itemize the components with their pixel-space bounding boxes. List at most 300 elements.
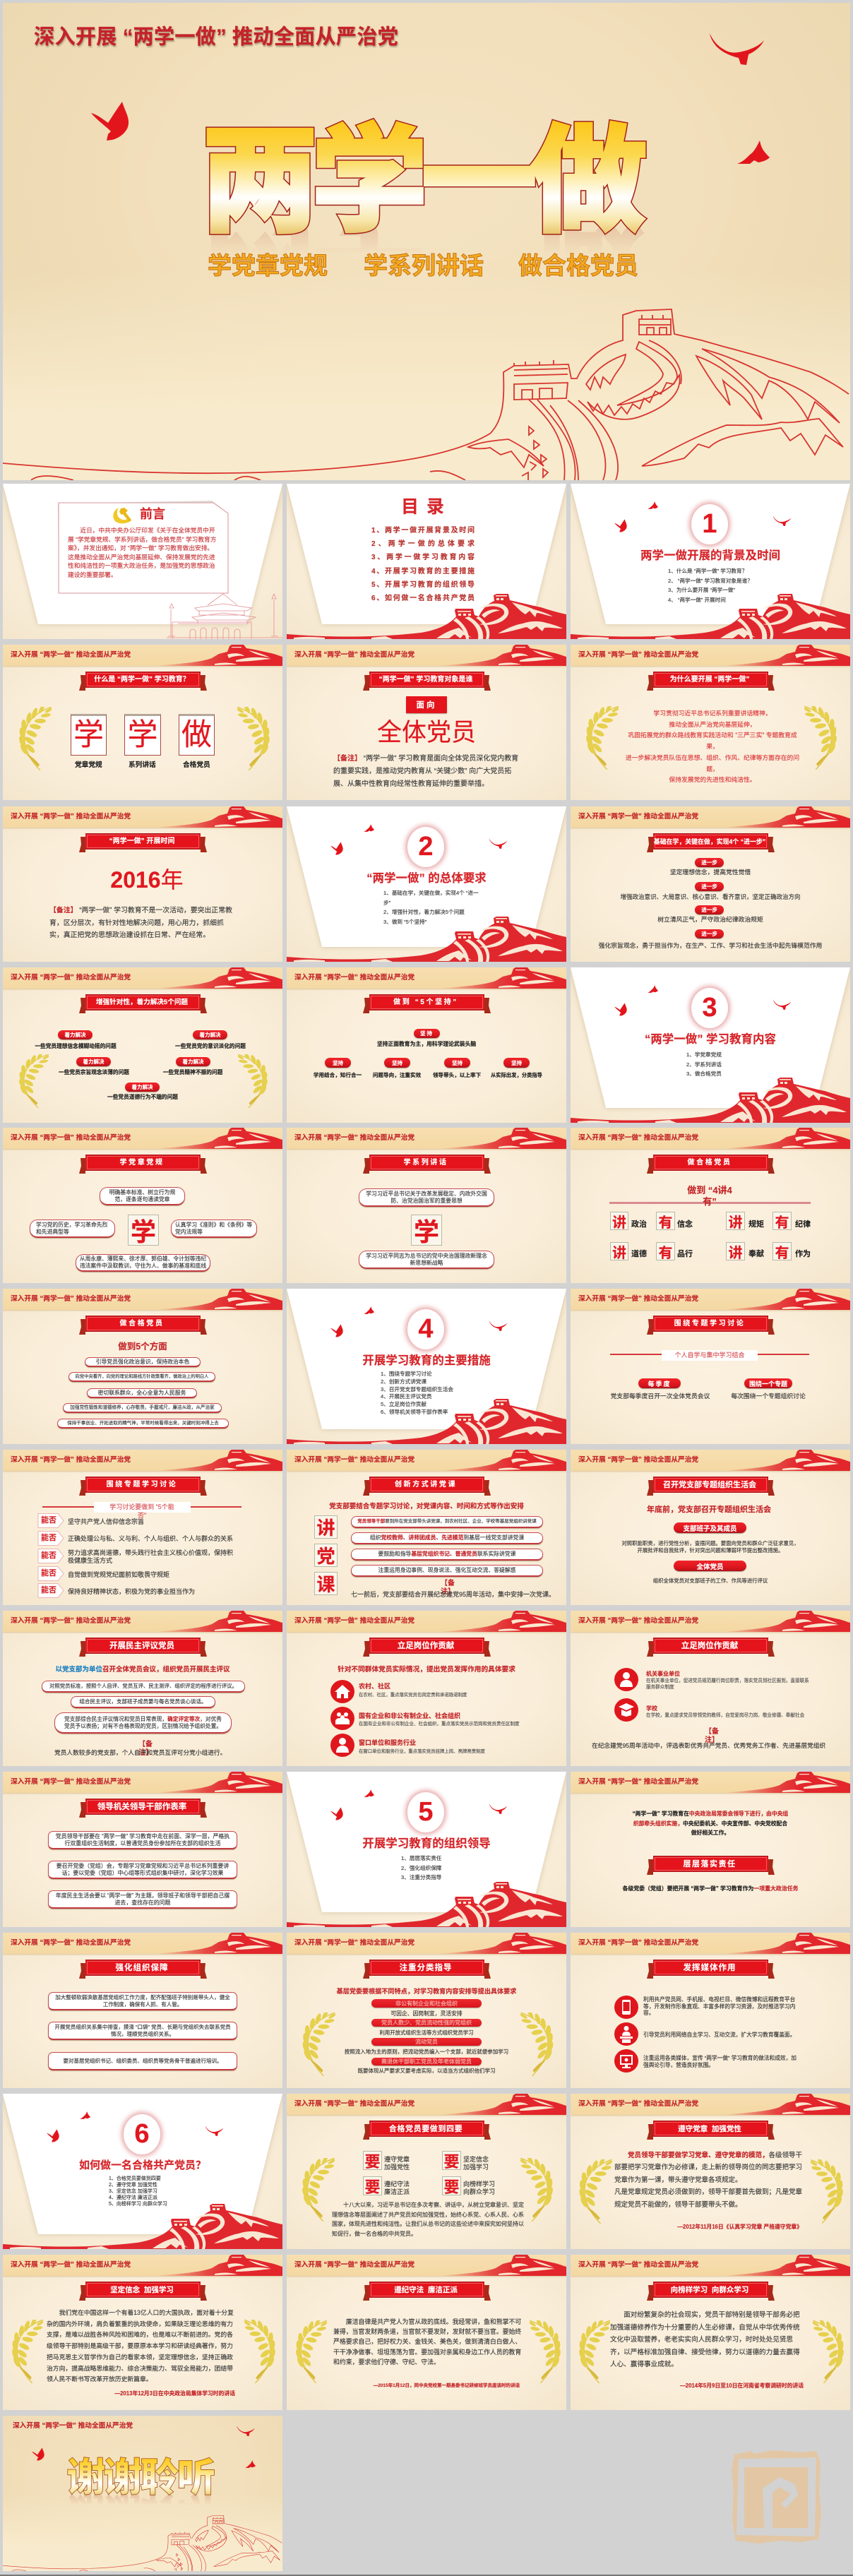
label text: 学习讨论要做到 “5个能否” <box>109 1503 174 1519</box>
pill 3: 密切联系群众，全心全意为人民服务 <box>98 1390 186 1395</box>
problem 1: 一些党员理想信念模糊动摇的问题 <box>35 1043 117 1049</box>
paragraph <box>614 2149 803 2211</box>
header band: 深入开展 “两学一做” 推动全面从严治党 <box>294 651 414 659</box>
bird left <box>91 102 129 141</box>
slide: 发挥媒体作用 <box>571 1933 850 2088</box>
group title: 农村、社区 <box>359 1683 390 1690</box>
pill right: 围绕一个专题 <box>749 1380 787 1387</box>
media text 2: 引导党员利用网络自主学习、互动交流，扩大学习教育覆盖面。 <box>643 2032 795 2038</box>
pill 2 <box>351 1532 543 1544</box>
bar 4 <box>371 2058 482 2065</box>
text 1: 坚定理想信念，提高党性觉悟 <box>670 869 751 876</box>
wheat right <box>520 2157 553 2222</box>
reasons text <box>626 710 799 783</box>
icon: school <box>614 1698 638 1722</box>
pill 4 <box>63 1403 222 1413</box>
great wall silhouette <box>571 594 850 639</box>
header band: 深入开展 “两学一做” 推动全面从严治党 <box>294 2261 414 2269</box>
section list: 1、层层落实责任 <box>401 1855 441 1861</box>
slide: 目录 <box>287 484 566 639</box>
面向 box: 面向 <box>417 701 436 710</box>
slide: 遵守党章 <box>571 2094 850 2249</box>
card captions: 系列讲话 <box>129 761 156 769</box>
note label: 【备注】 <box>441 1580 455 1596</box>
slide: section 3 <box>571 967 850 1123</box>
ribbon title <box>647 1854 775 1875</box>
box 要: 要 <box>364 2178 380 2196</box>
section list <box>109 2176 167 2207</box>
white label: 个人自学与集中学习结合 <box>674 1352 744 1359</box>
card 学: 学 <box>73 718 104 752</box>
wheat right <box>804 706 837 770</box>
header band: 深入开展 “两学一做” 推动全面从严治党 <box>11 1134 131 1142</box>
text top: 坚持正面教育为主，用科学理论武装头脑 <box>377 1041 476 1047</box>
pill right <box>744 1378 792 1388</box>
ribbon title <box>79 672 207 691</box>
slide: 立足岗位作贡献 2 <box>571 1611 850 1766</box>
bar 3: 流动党员 <box>415 2039 438 2045</box>
section list: 1、学党章党规 <box>686 1051 722 1058</box>
number circle <box>407 1792 444 1832</box>
panel 2: 要召开党委（党组）会，专题学习党章党规和习近平总书记系列重要讲话；要以党委（党组）中心组等形式组织集中研讨，深化学习效果 <box>56 1863 229 1876</box>
ribbon title <box>79 1474 207 1496</box>
pill 4: 着力解决 <box>182 1059 203 1065</box>
header band <box>287 1450 566 1471</box>
paragraph: 党员领导干部要做学习党章、遵守党章的模范，各级领导干部要把学习党章作为必修课，走上新的领导岗位的同志要把学习党章作为第一课，带头遵守党章各项规定。 <box>614 2152 802 2184</box>
box <box>726 1242 745 1260</box>
slide: 层层落实责任 <box>571 1772 850 1927</box>
pill 1: 引导党员强化政治意识，保持政治本色 <box>96 1359 189 1364</box>
header band: 深入开展 “两学一做” 推动全面从严治党 <box>578 1617 698 1625</box>
responsibility text: 各级党委（党组）要把开展 “两学一做” 学习教育作为一项重大政治任务 <box>622 1885 798 1892</box>
subheading: 针对不同群体党员实际情况，提出党员发挥作用的具体要求 <box>338 1666 515 1674</box>
reasons text: 学习贯彻习近平总书记系列重要讲话精神， <box>653 710 772 717</box>
header band: 深入开展 “两学一做” 推动全面从严治党 <box>11 974 131 982</box>
media text 1: 利用共产党员网、手机报、电视栏目、微信微博和远程教育平台等，开发制作形象直观、丰富多样的学习资源，及时推送学习内容。 <box>643 1996 795 2016</box>
header band <box>571 1933 850 1954</box>
label: 遵纪守法 <box>384 2181 410 2188</box>
number circle <box>407 1309 444 1349</box>
section list: 2、遵守党章 加强党性 <box>109 2183 157 2188</box>
contents list: 3、两学一做学习教育内容 <box>371 554 475 561</box>
contents list: 5、开展学习教育的组织领导 <box>371 581 475 589</box>
icon: computer <box>614 2049 638 2073</box>
slide: 坚定信念 <box>3 2255 282 2410</box>
ribbon title: 领导机关领导干部作表率 <box>97 1803 186 1811</box>
pill 4: 加强党性锻炼和道德修养，心存敬畏，手握戒尺，廉洁从政，从严治家 <box>70 1405 215 1409</box>
pill 2: 结合民主评议，支部班子成员要与每名党员谈心谈话。 <box>79 1698 206 1705</box>
header band <box>287 2255 566 2276</box>
white trapezoid <box>287 806 566 949</box>
box <box>726 1212 745 1230</box>
group title: 学校 <box>646 1705 657 1712</box>
header band <box>3 645 282 666</box>
header band: 深入开展 “两学一做” 推动全面从严治党 <box>294 1617 414 1625</box>
reasons text: 巩固拓展党的群众路线教育实践活动和 “三严三实” 专题教育成果， <box>628 732 797 750</box>
wheat left <box>19 1054 49 1108</box>
subheading: 以党支部为单位召开全体党员会议，组织党员开展民主评议 <box>55 1666 230 1674</box>
icon: person <box>614 1668 638 1691</box>
source: —2014年5月9日至10日在河南省考察调研时的讲话 <box>680 2383 804 2389</box>
ribbon title: 召开党支部专题组织生活会 <box>663 1481 756 1489</box>
box 讲: 讲 <box>316 1517 335 1539</box>
thanks title with reflection <box>3 2416 282 2571</box>
pill 5: 保持干事创业、开拓进取的精气神，平常时候看得出来，关键时刻冲得上去 <box>67 1421 219 1425</box>
text 3: 树立清风正气，严守政治纪律政治规矩 <box>657 916 763 923</box>
pill 1 <box>58 1030 93 1039</box>
pill 2: 向党中央看齐，向党的理论和路线方针政策看齐，做政治上的明白人 <box>76 1374 208 1378</box>
note label: 【备注】 <box>705 1728 719 1744</box>
label: 加强党性 <box>384 2164 410 2171</box>
pill top: 坚持 <box>420 1030 434 1037</box>
slide: 为什么要开展 <box>571 645 850 800</box>
slide: 创新方式讲党课 <box>287 1450 566 1605</box>
pill 2 <box>68 1372 215 1382</box>
striped band <box>609 1202 811 1204</box>
text 4: 领导带头，以上率下 <box>433 1072 481 1078</box>
ribbon title: 做合格党员 <box>120 1320 164 1328</box>
contents heading: 目录 <box>401 497 452 517</box>
cover lower light area <box>3 271 850 480</box>
ribbon title <box>363 2118 491 2140</box>
ribbon title: 围绕专题学习讨论 <box>674 1320 745 1328</box>
wheat left <box>302 2012 335 2076</box>
tag 3: 能否 <box>41 1551 56 1560</box>
header band: 深入开展 “两学一做” 推动全面从严治党 <box>294 1456 414 1464</box>
tag 1: 能否 <box>41 1516 56 1525</box>
slide: 5个能否 <box>3 1450 282 1605</box>
paragraph: 我们党在中国这样一个有着13亿人口的大国执政，面对着十分复杂的国内外环境，肩负着繁重的执政使命，如果缺乏理论思维的有力支撑，是难以战胜各种风险和困难的，也是难以不断前进的。党的各级领导干部特别是高级干部，要原原本本学习和研读经典著作，努力把马克思主义哲学作为自己的看家本领，坚定理想信念，坚持正确政治方向，提高战略思维能力、综合决策能力、驾驭全局能力，团结带领人民不断书写改革开放历史新篇章。 <box>47 2309 234 2383</box>
label: 信念 <box>677 1220 693 1229</box>
slide: 遵纪守法 <box>287 2255 566 2410</box>
pill 4 <box>444 1058 470 1068</box>
source: —2013年12月3日在中央政治局集体学习时的讲话 <box>114 2390 235 2397</box>
slide: 领导干部作表率 <box>3 1772 282 1927</box>
great wall silhouette <box>287 1772 566 1927</box>
birds <box>287 1289 566 1444</box>
panel 1: 党员领导干部要在 “两学一做” 学习教育中走在前面、深学一层，严格执行双重组织生活制度，以普通党员身份参加所在支部的组织生活 <box>56 1833 229 1846</box>
section list: 4、遵纪守法 廉洁正派 <box>109 2195 157 2200</box>
subtitle: 做合格党员 <box>518 253 638 280</box>
slide: 什么是两学一做 <box>3 645 282 800</box>
wheat right <box>813 2320 844 2383</box>
wheat left <box>296 2320 327 2383</box>
card 做 <box>179 714 215 756</box>
slide: section 5 <box>287 1772 566 1927</box>
ribbon title: 开展民主评议党员 <box>109 1642 174 1650</box>
white trapezoid <box>571 967 850 1123</box>
ribbon title: “两学一做” 学习教育对象是谁 <box>379 676 472 684</box>
great wall outline <box>3 309 849 480</box>
section list: 5、立足岗位作贡献 <box>381 1401 426 1407</box>
section list: 1、什么是 “两学一做” 学习教育？ <box>668 568 747 574</box>
panel 1 <box>48 1992 237 2010</box>
pill 5 <box>503 1058 530 1068</box>
bubble left: 学习党的历史，学习革命先烈和先进典型等 <box>36 1222 107 1234</box>
header band: 深入开展 “两学一做” 推动全面从严治党 <box>578 1295 698 1303</box>
slide: 民主评议 <box>3 1611 282 1766</box>
ribbon title <box>363 1635 491 1657</box>
problem 2: 一些党员党的意识淡化的问题 <box>175 1043 246 1049</box>
box: 有 <box>775 1215 789 1230</box>
label: 品行 <box>677 1250 693 1258</box>
bubble bottom: 学习习近平同志为总书记的党中央治国理政新理念新思想新战略 <box>366 1253 487 1265</box>
reasons text: 推动全面从严治党向基层延伸， <box>669 721 756 728</box>
paragraph: 十八大以来，习近平总书记在多次考察、讲话中，从树立党章意识、坚定理想信念等层面阐述了共产党员如何加强党性，始终心系党、心系人民、心系国家，体现先进性和纯洁性。让我们从总书记的这些论述中来探究如何坚持以知促行，做一名合格的中共党员。 <box>332 2202 524 2237</box>
面向 box <box>406 696 447 713</box>
bubble right: 认真学习《准则》和《条例》等党内法规等 <box>175 1222 252 1234</box>
white label <box>94 1502 191 1513</box>
label: 遵守党章 <box>384 2156 410 2163</box>
ribbon title <box>647 1313 775 1335</box>
pill 5: 着力解决 <box>131 1084 153 1090</box>
box: 讲 <box>729 1215 743 1230</box>
section list: 2、强化组织保障 <box>401 1865 441 1871</box>
ribbon title: 立足岗位作贡献 <box>398 1642 454 1650</box>
card 学 <box>124 714 161 756</box>
section heading: “两学一做” 学习教育内容 <box>645 1033 776 1046</box>
white trapezoid <box>287 484 566 627</box>
text 1: 可因企、因岗制宜，灵活安排 <box>390 2010 463 2017</box>
section list <box>668 568 753 603</box>
media text 3: 注重运用各类媒体，宣传 “两学一做” 学习教育的做法和成效，加强舆论引导，营造良好氛围。 <box>643 2055 797 2068</box>
group text: 在学校，重点提求党员带领党的教师，自觉爱岗尽力岗、敬业修德、奉献社会 <box>646 1713 804 1718</box>
number circle: 4 <box>418 1314 434 1344</box>
header band <box>571 1128 850 1149</box>
group text: 在窗口单位和服务行业，重点落实党员挂牌上岗、亮牌亮责制度 <box>359 1749 485 1754</box>
box 要: 要 <box>443 2178 459 2196</box>
section list: 4、开展民主评议党员 <box>381 1393 432 1400</box>
pill 2: 全体党员 <box>696 1563 723 1570</box>
header band: 深入开展 “两学一做” 推动全面从严治党 <box>11 1778 131 1786</box>
slide: 四要 <box>287 2094 566 2249</box>
header band: 深入开展 “两学一做” 推动全面从严治党 <box>294 1134 414 1142</box>
header band <box>3 1772 282 1793</box>
icon: service person <box>330 1734 354 1757</box>
number circle: 2 <box>418 832 434 861</box>
icon: hammer and sickle <box>113 508 131 524</box>
pill 1: 着力解决 <box>65 1032 86 1038</box>
bar 2 <box>371 2019 482 2027</box>
subheading: 党支部要结合专题学习讨论，对党课内容、时间和方式等作出安排 <box>329 1503 524 1510</box>
label: 向群众学习 <box>463 2188 495 2195</box>
header band: 深入开展 “两学一做” 推动全面从严治党 <box>294 974 414 982</box>
header band <box>571 2094 850 2115</box>
pill 3 <box>384 1058 410 1068</box>
panel 1 <box>48 1831 237 1849</box>
character box 学: 学 <box>414 1217 439 1246</box>
pill 3 <box>695 905 724 914</box>
big words: 全体党员 <box>377 719 476 746</box>
great wall silhouette <box>571 967 850 1123</box>
box: 有 <box>658 1215 672 1230</box>
pill 3 <box>54 1712 232 1734</box>
ribbon title <box>647 2118 775 2140</box>
pill 2 <box>71 1696 215 1708</box>
section list: 3、做合格党员 <box>686 1071 722 1077</box>
icon: people <box>330 1707 354 1730</box>
box <box>773 1212 792 1230</box>
subtitle: 学系列讲话 <box>364 253 484 280</box>
tag 5: 能否 <box>41 1586 56 1594</box>
note text: 七一前后，党支部要结合开展纪念建党95周年活动，集中安排一次党课。 <box>351 1591 555 1598</box>
ribbon title: 为什么要开展 “两学一做” <box>670 676 749 684</box>
slide: section 1 <box>571 484 850 639</box>
ribbon title <box>79 1152 207 1174</box>
header band <box>3 1450 282 1471</box>
label: 作为 <box>795 1250 811 1258</box>
header band <box>571 1611 850 1632</box>
header band <box>571 806 850 828</box>
item 1: 坚守共产党人信仰信念宗旨 <box>68 1518 144 1525</box>
panel 3: 要对基层党组织书记、组织委员、组织员等党务骨干普遍进行培训。 <box>64 2058 222 2063</box>
box 党: 党 <box>316 1546 335 1567</box>
main title with reflection: 两学一做 <box>201 117 648 247</box>
preface card <box>58 501 229 593</box>
lower light area <box>3 2493 282 2571</box>
contents list: 4、开展学习教育的主要措施 <box>371 568 475 576</box>
section list: 2、增强针对性，着力解决5个问题 <box>383 909 465 915</box>
ribbon title <box>363 992 491 1013</box>
wheat right <box>520 2012 554 2076</box>
text 4: 强化宗旨观念，勇于担当作为，在生产、工作、学习和社会生活中起先锋模范作用 <box>599 942 822 949</box>
pill 1 <box>42 1681 245 1693</box>
section list: 3、召开党支部专题组织生活会 <box>381 1386 453 1393</box>
top title: 深入开展 “两学一做” 推动全面从严治党 <box>13 2422 133 2430</box>
item 4: 自觉做到党规党纪面前如敬畏守规矩 <box>68 1571 169 1578</box>
header band: 深入开展 “两学一做” 推动全面从严治党 <box>294 1939 414 1947</box>
Tiananmen outline <box>167 593 282 639</box>
main title with reflection: 两学一做 <box>201 117 648 247</box>
bird top right <box>710 33 764 65</box>
card captions: 党章党规 <box>75 761 102 769</box>
header band: 深入开展 “两学一做” 推动全面从严治党 <box>11 1295 131 1303</box>
pill 3 <box>76 1057 111 1066</box>
number circle: 3 <box>702 993 717 1022</box>
panel 3 <box>48 1890 237 1909</box>
text 1: 对照职能职责，进行党性分析，查摆问题。要面向党员和群众广泛征求意见， <box>621 1540 799 1546</box>
slide: 学系列讲话 <box>287 1128 566 1283</box>
slide: 谢谢聆听 <box>3 2416 282 2571</box>
header band <box>287 1611 566 1632</box>
item 5: 保持良好精神状态，积极为党的事业担当作为 <box>68 1588 195 1595</box>
header band: 深入开展 “两学一做” 推动全面从严治党 <box>11 2261 131 2269</box>
item 2: 正确处理公与私、义与利、个人与组织、个人与群众的关系 <box>68 1535 233 1542</box>
wheat right <box>530 2320 561 2383</box>
white trapezoid <box>571 484 850 627</box>
ribbon title <box>79 992 207 1013</box>
tag 2 <box>37 1531 64 1546</box>
pill 1: 支部班子及其成员 <box>683 1525 737 1532</box>
pill 2: 坚持 <box>333 1059 343 1066</box>
panel 3: 年度民主生活会要以 “两学一做” 为主题，领导班子和领导干部把自己摆进去，查找存在的问题 <box>56 1892 229 1905</box>
header band <box>3 967 282 989</box>
row 2 box <box>610 1242 628 1260</box>
pill 3 <box>351 1549 543 1561</box>
problem 4: 一些党员精神不振的问题 <box>163 1069 222 1075</box>
slide: 4讲4有 <box>571 1128 850 1283</box>
text 2: 组织全体党员对支部班子的工作、作风等进行评议 <box>653 1578 768 1584</box>
white trapezoid <box>3 484 282 627</box>
label: 坚定信念 <box>463 2156 489 2163</box>
birds <box>3 2094 282 2249</box>
section list <box>686 1050 722 1079</box>
slide: 前言 <box>3 484 282 639</box>
slide: 进一步 <box>571 806 850 962</box>
header band <box>3 2255 282 2276</box>
section list: 6、领导机关领导干部作表率 <box>381 1409 448 1415</box>
reasons text: 保持发展党的先进性和纯洁性。 <box>669 776 756 783</box>
bubble top <box>359 1188 494 1207</box>
pill 4: 进一步 <box>701 931 717 937</box>
note text: 党员人数较多的党支部，个人自评和党员互评可分党小组进行。 <box>54 1749 226 1756</box>
text 1 <box>599 1540 822 1554</box>
label <box>384 2156 410 2171</box>
bird right middle <box>737 141 770 164</box>
card captions: 合格党员 <box>183 761 210 769</box>
label: 廉洁正派 <box>384 2188 410 2195</box>
white trapezoid <box>287 1289 566 1444</box>
row 2 box: 讲 <box>612 1246 626 1261</box>
ribbon title: 学党章党规 <box>120 1159 164 1167</box>
pill 4 <box>695 929 724 938</box>
ribbon title <box>79 2279 207 2301</box>
pill 3: 坚持 <box>392 1059 402 1066</box>
section list: 2、创新方式讲党课 <box>381 1378 426 1385</box>
pill 1 <box>351 1516 543 1528</box>
header band <box>287 2094 566 2115</box>
text 3: 问题导向，注重实效 <box>373 1072 421 1078</box>
subheading: 年底前，党支部召开专题组织生活会 <box>647 1505 771 1514</box>
section heading: 开展学习教育的主要措施 <box>362 1354 491 1367</box>
slide: section 4 <box>287 1289 566 1444</box>
preface heading: 前言 <box>140 507 165 521</box>
subtitle <box>208 253 638 280</box>
contents list: 1、两学一做开展背景及时间 <box>371 527 475 535</box>
box: 讲 <box>729 1246 743 1261</box>
section heading: 如何做一名合格共产党员？ <box>79 2159 206 2171</box>
section heading: 开展学习教育的组织领导 <box>362 1837 491 1850</box>
slide: section 2 <box>287 806 566 962</box>
cover slide: 两学一做 <box>3 3 850 480</box>
white label <box>662 1350 758 1361</box>
slide: 对象是谁 <box>287 645 566 800</box>
source: —2015年1月12日，同中央党校第一期县委书记研修班学员座谈时的讲话 <box>374 2383 520 2388</box>
problem 3: 一些党员宗旨观念淡薄的问题 <box>59 1069 129 1075</box>
ribbon title <box>79 1313 207 1335</box>
pill 2: 进一步 <box>701 883 717 890</box>
paragraph: 凡是党章规定党员必须做到的，领导干部要首先做到；凡是党章规定党员不能做的，领导干部要带头不做。 <box>614 2188 802 2209</box>
box <box>656 1242 675 1260</box>
text 4: 既要体现从严要求又要考虑实际，以适当方式组织他们学习 <box>357 2068 496 2074</box>
slide: 学党章党规 <box>3 1128 282 1283</box>
header band: 深入开展 “两学一做” 推动全面从严治党 <box>578 2100 698 2108</box>
note text: 【备注】 “两学一做” 学习教育不是一次活动，要突出正常教育，区分层次，有针对性地解决问题，用心用力，抓细抓实，真正把党的思想政治建设抓在日常、严在经常。 <box>49 907 232 939</box>
bar 3 <box>371 2038 482 2046</box>
header band <box>3 1128 282 1149</box>
text left: 党支部每季度召开一次全体党员会议 <box>611 1393 710 1400</box>
box 课: 课 <box>316 1574 335 1595</box>
row 1 items <box>610 1212 628 1230</box>
section list <box>381 1371 453 1417</box>
header band: 深入开展 “两学一做” 推动全面从严治党 <box>578 651 698 659</box>
header band: 深入开展 “两学一做” 推动全面从严治党 <box>578 1134 698 1142</box>
lead paragraph: “两学一做” 学习教育在中央政治局常委会领导下进行，由中央组织部牵头组织实施，中央纪委机关、中央宣传部、中央党校配合做好相关工作。 <box>633 1811 788 1836</box>
ribbon title: 遵纪守法 廉洁正派 <box>394 2286 458 2294</box>
preface text: 近日，中共中央办公厅印发《关于在全体党员中开展 “学党章党规、学系列讲话，做合格党员” 学习教育方案》，并发出通知，对 “两学一做” 学习教育做出安排。这是推动全面从严治党向基层延伸、保持发展党的先进性和纯洁性的一项重大政治任务，是加强党的思想政治建设的重要部署。 <box>68 527 216 578</box>
slide: 强化组织保障 <box>3 1933 282 2088</box>
ribbon title <box>79 1796 207 1818</box>
